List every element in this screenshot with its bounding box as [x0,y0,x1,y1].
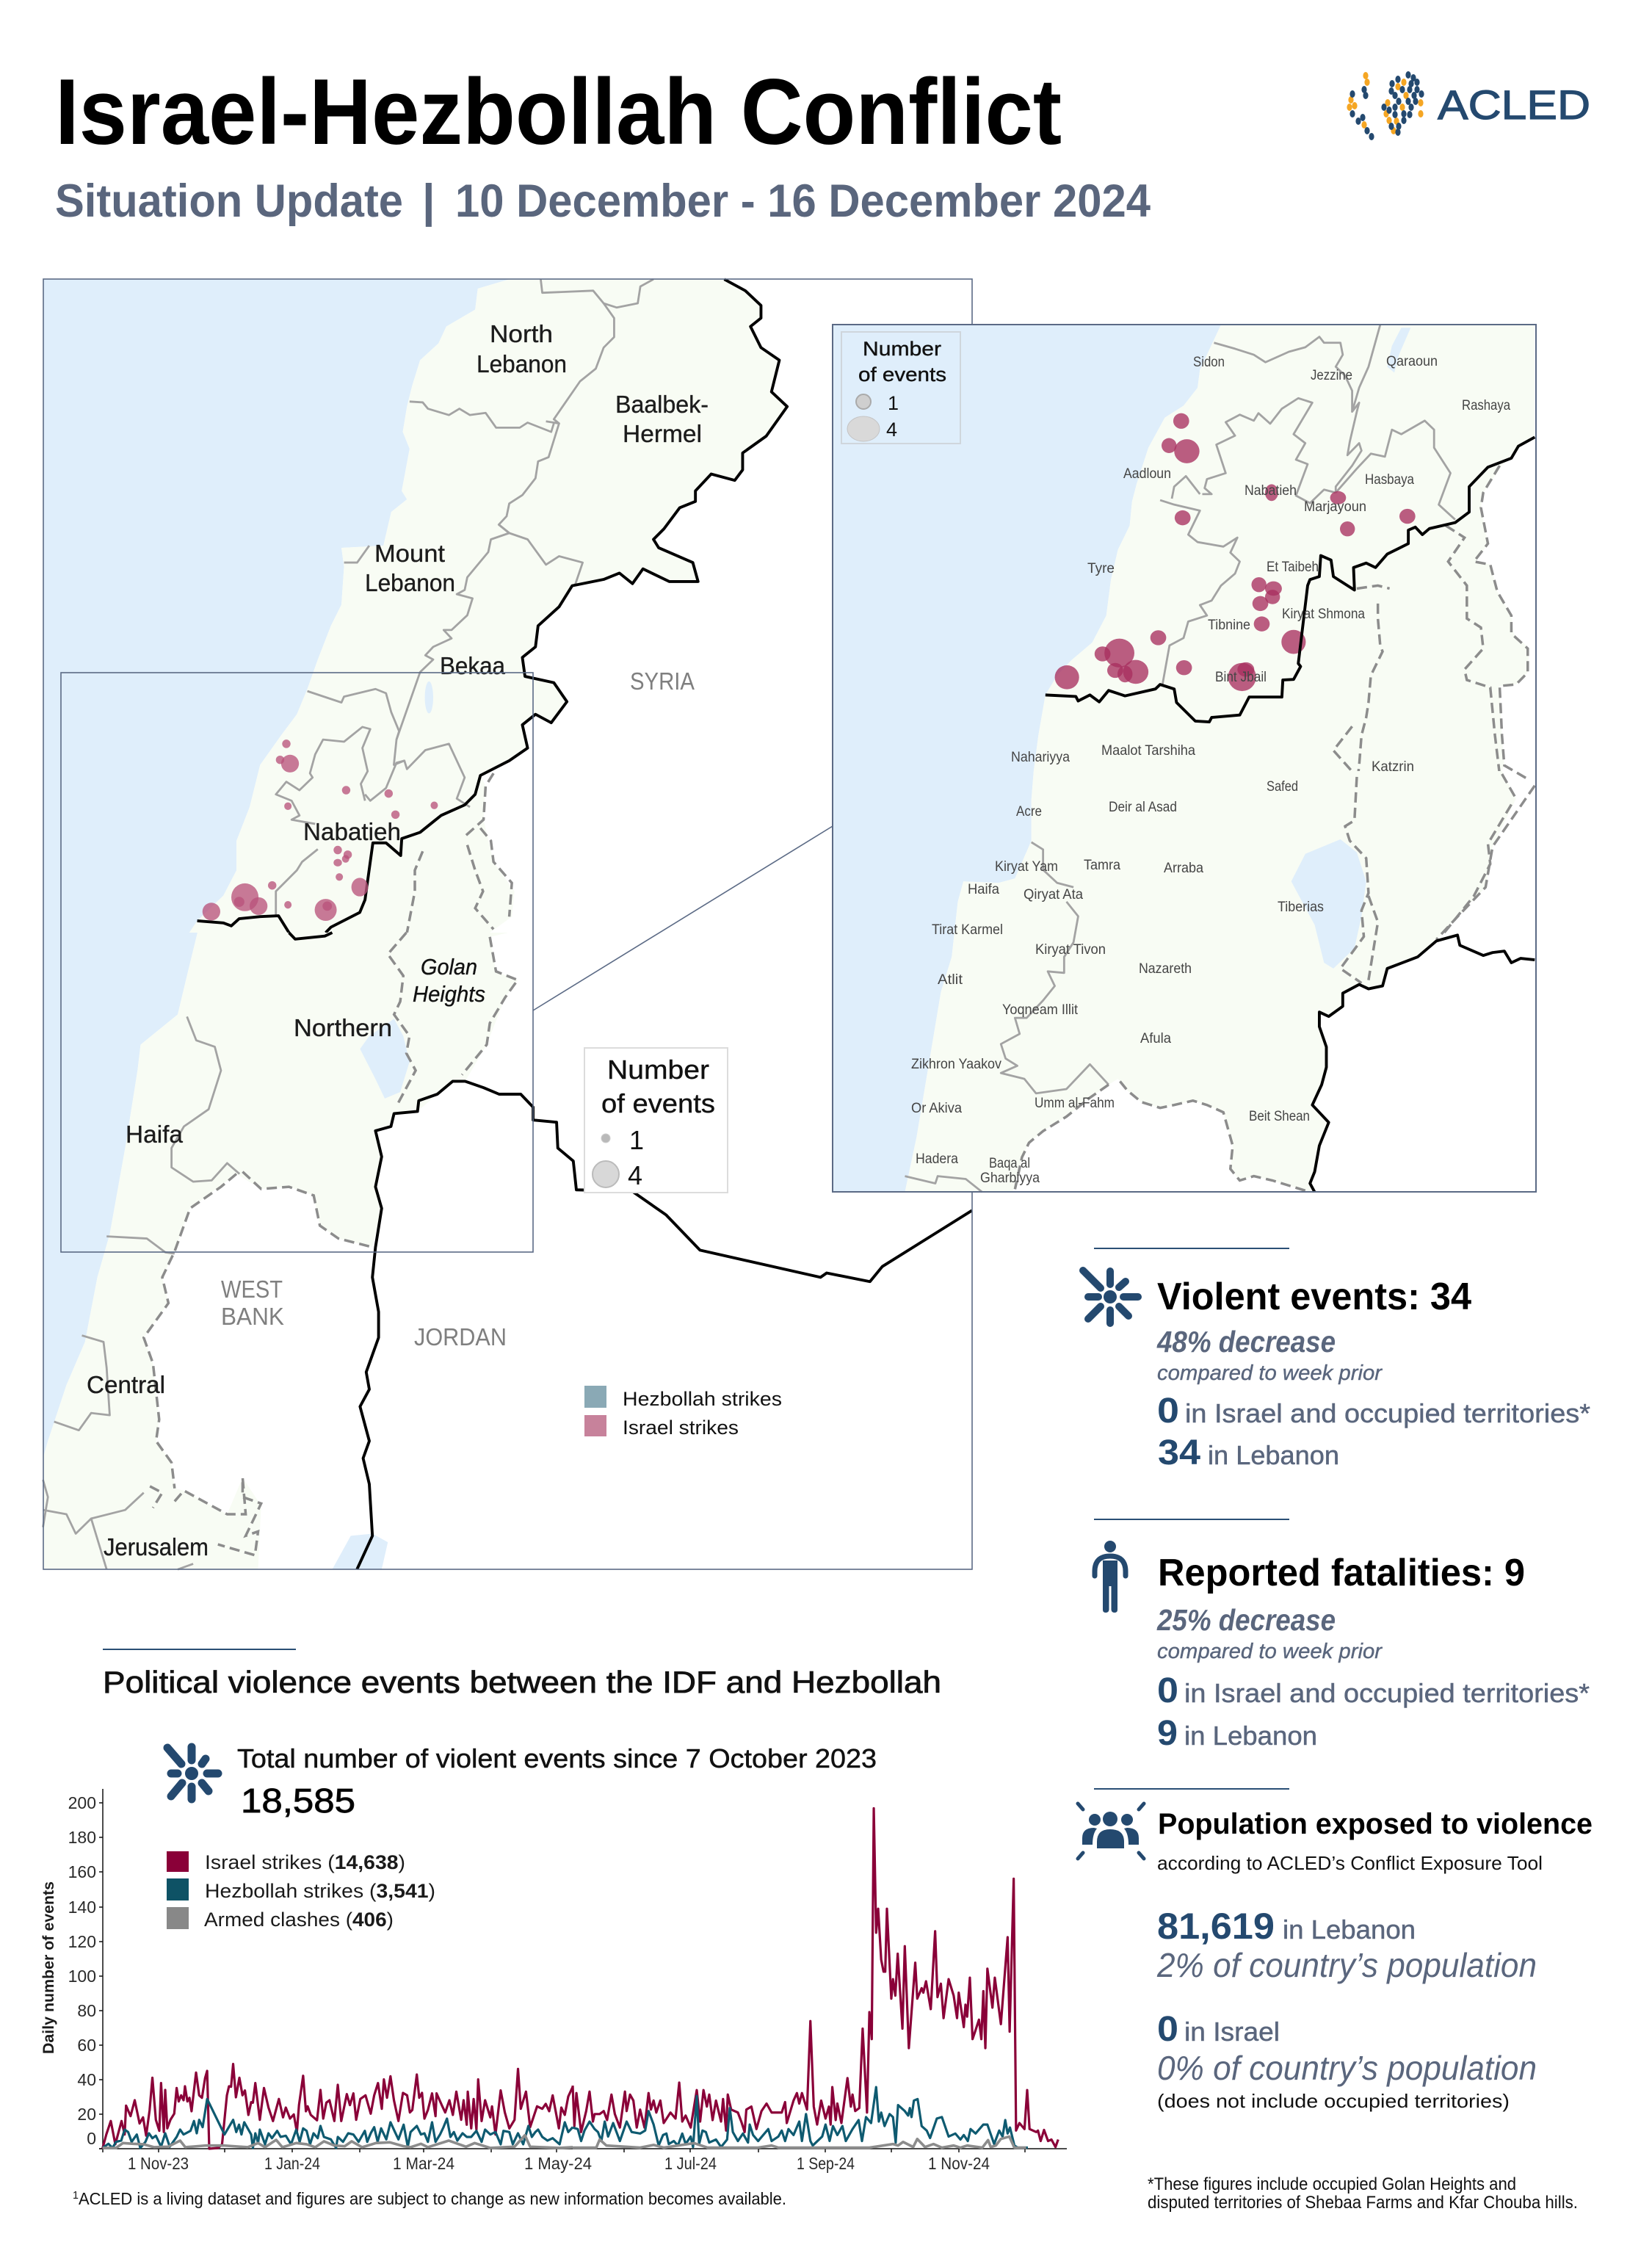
panel: violent events: 0 [1157,1392,1179,1431]
main map region labels: JORDAN [414,1323,507,1350]
panel: violent events: 34 [1158,1433,1200,1472]
panel: inset map [833,325,1536,1192]
panel: population exposed: 2% of country’s population [1156,1946,1537,1984]
inset map place labels: Zikhron Yaakov [911,1057,1001,1072]
main map region labels: WEST [221,1276,283,1303]
main map legend: strike types: Hezbollah strikes [623,1388,782,1410]
panel: reported fatalities: in Lebanon [1184,1721,1317,1751]
panel: violent events: compared to week prior [1157,1361,1383,1385]
inset map place labels: Afula [1140,1031,1171,1046]
inset map place labels: Kiryat Shmona [1282,607,1365,622]
chart legend: Israel strikes ( 14,638) [205,1851,405,1873]
inset map place labels: Bint Jbail [1215,670,1267,685]
icon: group of people [1078,1804,1144,1859]
panel: violent events: Violent events: 34 [1157,1276,1471,1318]
footnote: living dataset: 1 [73,2189,79,2202]
y axis: 20 [77,2105,96,2124]
main map legend: strike types: Israel strikes [623,1417,739,1439]
y axis: 40 [77,2070,96,2089]
y axis: 200 [68,1793,96,1812]
line chart: daily events [40,1789,1067,2173]
y axis: 140 [68,1898,96,1917]
icon: person [1095,1541,1126,1613]
inset map place labels: Tirat Karmel [932,922,1003,938]
panel: violent events [1083,1248,1590,1472]
y axis [40,1789,103,2149]
main map region labels [87,320,709,1560]
total events text [237,1743,877,1820]
footnote: occupied territories: *These figures include occupied Golan Heights and [1148,2174,1516,2194]
panel: reported fatalities [1094,1519,1590,1753]
inset legend: number of events [841,332,960,444]
inset map place labels: Tyre [1087,561,1115,576]
icon: total events burst [167,1747,218,1799]
main map region labels: Heights [413,981,485,1007]
inset map place labels: Arraba [1164,861,1203,876]
panel: reported fatalities: Reported fatalities: 9 [1158,1552,1525,1594]
x axis: 1 Jan-24 [264,2154,320,2173]
inset map place labels: Hasbaya [1365,472,1414,488]
inset map place labels: Tiberias [1278,900,1324,915]
y axis: 120 [68,1932,96,1951]
inset map place labels: Jezzine [1311,368,1352,383]
inset map place labels: Marjayoun [1304,499,1366,515]
inset legend: number of events: 4 [886,419,897,441]
map north section: Lebanon [43,279,787,933]
main map region labels: Mount [374,540,445,567]
inset north section: South Lebanon [833,325,1535,786]
chart legend [167,1851,435,1931]
ACLED logo [1347,71,1590,140]
main map legend: number of events: Number [607,1055,709,1085]
subtitle: 10 December - 16 December 2024 [455,176,1151,227]
title: Israel-Hezbollah Conflict [55,59,1062,164]
inset map place labels: Tamra [1084,858,1120,873]
panel: reported fatalities: 0 [1157,1671,1178,1710]
main map region labels: SYRIA [630,668,695,695]
panel: population exposed: 0% of country’s population [1157,2049,1537,2087]
inset legend: number of events: 1 [888,392,899,414]
inset map place labels: Acre [1016,804,1042,820]
y axis: 160 [68,1862,96,1881]
total events text: Total number of violent events since 7 October 2023 [237,1743,877,1773]
subtitle: | [422,176,435,227]
series lines, second half [573,1808,1058,2148]
main map legend: number of events: of events [601,1088,715,1118]
map south section: Israel and West Bank [43,933,972,1569]
footnote: occupied territories [1148,2174,1578,2213]
panel: reported fatalities: compared to week prior [1157,1640,1383,1663]
main map region labels: BANK [221,1303,284,1330]
inset map place labels [911,354,1510,1186]
event bubbles on main map [203,739,438,921]
chart heading: Political violence events between the IDF and Hezbollah [103,1665,941,1699]
subtitle [55,176,1151,227]
inset map place labels: Baqa al [989,1156,1030,1171]
inset map place labels: Atlit [938,972,963,988]
main map legend: number of events [584,1048,728,1193]
inset legend: number of events: Number [863,338,941,360]
x axis: 1 Jul-24 [664,2154,717,2173]
inset map place labels: Nazareth [1139,961,1192,977]
inset map place labels: Qaraoun [1386,354,1438,369]
inset map place labels: Aadloun [1123,466,1171,482]
footnote: living dataset: ACLED is a living dataset and figures are subject to change as new information becomes available. [79,2189,786,2208]
total events text: 18,585 [241,1782,355,1820]
main map region labels: Nabatieh [303,818,401,845]
series lines, first half [103,2064,573,2149]
panel: reported fatalities: 25% decrease [1156,1603,1336,1637]
panel: population exposed: 81,619 [1157,1906,1275,1947]
inset map place labels: Et Taibeh [1267,560,1319,575]
panel: population exposed: according to ACLED’s Conflict Exposure Tool [1157,1852,1543,1874]
icon: violence burst [1083,1270,1138,1323]
inset map place labels: Beit Shean [1249,1109,1310,1124]
y axis: 80 [77,2001,96,2020]
x axis: 1 Nov-23 [128,2154,189,2173]
inset legend: number of events: of events [858,364,946,386]
panel: reported fatalities: in Israel and occupied territories* [1184,1678,1590,1708]
panel: population exposed: Population exposed to violence [1158,1808,1593,1840]
inset map place labels: Umm al-Fahm [1035,1096,1115,1111]
main map region labels: Lebanon [365,569,455,596]
y axis: 180 [68,1828,96,1847]
main map region labels: Lebanon [477,350,567,377]
main map region labels: Haifa [126,1121,184,1148]
inset map place labels: Deir al Asad [1109,800,1177,815]
main map legend: strike types [584,1386,782,1439]
panel: violent events: 48% decrease [1156,1325,1336,1359]
panel: population exposed: in Israel [1184,2017,1280,2047]
main map region labels: Baalbek- [615,391,709,418]
ACLED logo: ACLED [1438,82,1590,128]
inset map place labels: Haifa [968,882,999,897]
subtitle: Situation Update [55,176,403,227]
x axis: 1 Mar-24 [393,2154,454,2173]
inset map place labels: Or Akiva [911,1101,962,1116]
panel: population exposed: (does not include occupied territories) [1157,2090,1510,2112]
panel: population exposed: 0 [1157,2010,1178,2049]
panel: violent events: in Israel and occupied territories* [1185,1398,1590,1428]
main map region labels: Jerusalem [104,1533,209,1560]
y axis: 0 [87,2129,96,2148]
inset locator box and connector [61,673,833,1252]
inset map place labels: Nabatieh [1245,483,1297,499]
inset map place labels: Maalot Tarshiha [1101,743,1195,759]
y axis: 100 [68,1967,96,1986]
panel: population exposed: in Lebanon [1283,1914,1416,1945]
inset map place labels: Safed [1267,779,1298,795]
main map legend: number of events: 1 [629,1125,644,1155]
x axis: 1 Nov-24 [928,2154,990,2173]
main map region labels: Central [87,1371,165,1398]
panel: main map [43,279,972,1569]
x axis: 1 Sep-24 [797,2154,855,2173]
panel: reported fatalities: 9 [1157,1714,1178,1753]
chart legend: Armed clashes ( 406) [204,1909,394,1931]
inset map place labels: Nahariyya [1011,750,1070,765]
inset map place labels: Kiryat Yam [995,859,1058,875]
y axis: 60 [77,2036,96,2055]
x axis: 1 May-24 [524,2154,592,2173]
main map region labels: Hermel [623,420,702,447]
inset south section: Northern Israel [833,771,1535,1192]
main map region labels: Northern [294,1014,392,1041]
inset map place labels: Hadera [916,1151,958,1167]
x axis [99,2149,1067,2173]
main map legend: number of events: 4 [628,1160,642,1190]
main map region labels: Golan [421,954,477,980]
panel: population exposed [1078,1789,1593,2112]
inset map place labels: Katzrin [1372,759,1414,775]
main map region labels: Bekaa [440,652,506,679]
chart legend: Hezbollah strikes ( 3,541) [205,1880,435,1902]
event bubbles on inset map [1055,413,1416,691]
main map region labels: North [490,320,553,347]
y axis: Daily number of events [40,1881,57,2054]
footnote: occupied territories: disputed territories of Shebaa Farms and Kfar Chouba hills. [1148,2193,1578,2213]
inset map place labels: Tibnine [1208,618,1250,633]
panel: violent events: in Lebanon [1208,1440,1339,1470]
inset map place labels: Qiryat Ata [1024,887,1083,903]
inset map place labels: Kiryat Tivon [1035,942,1106,958]
inset map place labels: Sidon [1193,355,1225,370]
inset map place labels: Yoqneam Illit [1002,1002,1079,1018]
inset map place labels: Rashaya [1462,398,1510,413]
inset map place labels: Gharbiyya [980,1171,1040,1186]
